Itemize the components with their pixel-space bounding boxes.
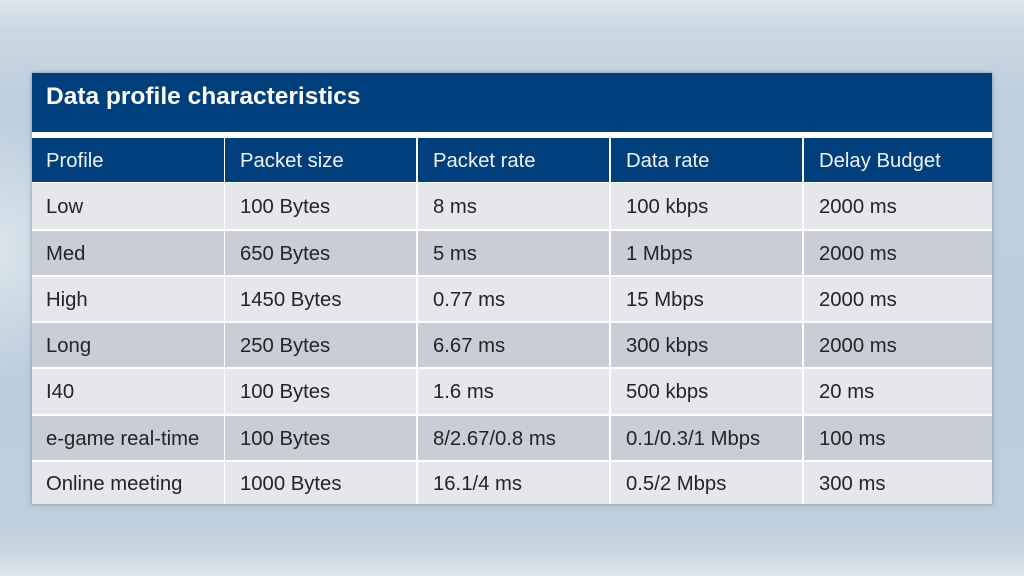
row: High	[32, 277, 992, 321]
row: Long: Long	[46, 334, 91, 356]
row: Med: 2000 ms	[819, 242, 897, 264]
row: Low: 2000 ms	[819, 196, 897, 218]
row: e-game real-time: 100 Bytes	[240, 428, 330, 450]
title: Data profile characteristics	[32, 73, 992, 132]
row: Low	[32, 183, 992, 229]
table header row: Profile	[46, 150, 104, 172]
row: I40: 20 ms	[819, 381, 874, 403]
row: Long: 6.67 ms	[433, 334, 505, 356]
row: Med: 650 Bytes	[240, 242, 330, 264]
row: High: 15 Mbps	[626, 288, 704, 310]
row: I40: I40	[46, 381, 74, 403]
panel: data profile table	[32, 73, 992, 504]
row: e-game real-time: 8/2.67/0.8 ms	[433, 428, 556, 450]
row: Low: 100 kbps	[626, 196, 708, 218]
row: e-game real-time: 0.1/0.3/1 Mbps	[626, 428, 760, 450]
row: Long: 250 Bytes	[240, 334, 330, 356]
row: High: 2000 ms	[819, 288, 897, 310]
title: Data profile characteristics: Data profile characteristics	[46, 83, 361, 110]
row: Long: 2000 ms	[819, 334, 897, 356]
table header row: Packet size	[240, 150, 344, 172]
table header row: Data rate	[626, 150, 709, 172]
row: High: 1450 Bytes	[240, 288, 341, 310]
row: Online meeting: 16.1/4 ms	[433, 472, 522, 494]
row: e-game real-time: e-game real-time	[46, 428, 199, 450]
row: Low: 100 Bytes	[240, 196, 330, 218]
row: I40: 500 kbps	[626, 381, 708, 403]
table header row	[32, 138, 992, 182]
table header row: Packet rate	[433, 150, 536, 172]
row: Online meeting: Online meeting	[46, 472, 182, 494]
row: Med: 1 Mbps	[626, 242, 693, 264]
row: Online meeting: 1000 Bytes	[240, 472, 341, 494]
row: High: High	[46, 288, 88, 310]
row: Low: 8 ms	[433, 196, 477, 218]
row: Online meeting	[32, 462, 992, 504]
row: Low: Low	[46, 196, 83, 218]
row: e-game real-time: 100 ms	[819, 428, 886, 450]
row: Online meeting: 0.5/2 Mbps	[626, 472, 726, 494]
row: Med	[32, 231, 992, 275]
row: e-game real-time	[32, 416, 992, 460]
row: Long: 300 kbps	[626, 334, 708, 356]
row: I40: 100 Bytes	[240, 381, 330, 403]
row: I40: 1.6 ms	[433, 381, 494, 403]
row: I40	[32, 369, 992, 414]
row: Long	[32, 323, 992, 367]
row: High: 0.77 ms	[433, 288, 505, 310]
row: Med: Med	[46, 242, 85, 264]
row: Online meeting: 300 ms	[819, 472, 886, 494]
row: Med: 5 ms	[433, 242, 477, 264]
table header row: Delay Budget	[819, 150, 941, 172]
